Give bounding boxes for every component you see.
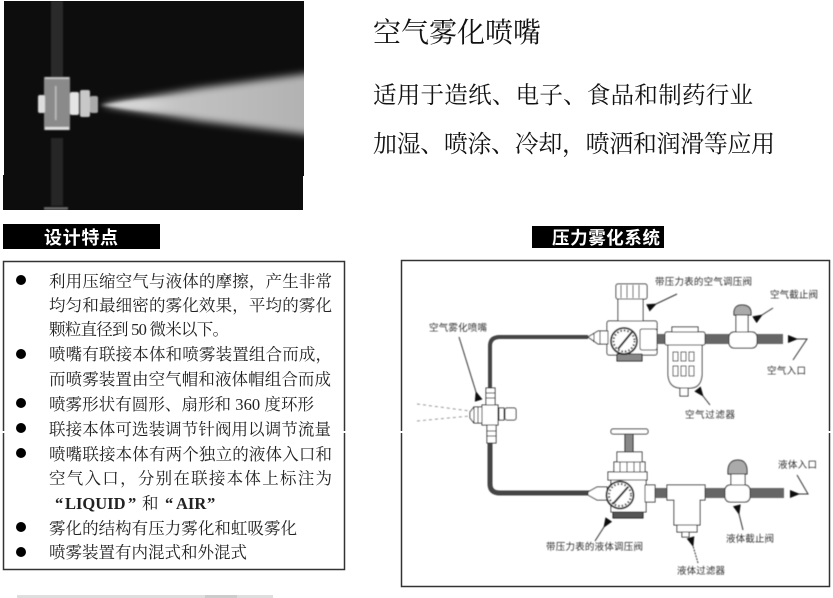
diagram labels: 空气雾化喷嘴 (429, 322, 487, 334)
feature text lines: 空气入口，分别在联接本体上标注为 (49, 469, 332, 488)
panel: pressure atomizing system diagram (400, 260, 831, 586)
feature text lines: 利用压缩空气与液体的摩擦，产生非常 (49, 272, 332, 291)
subtitle: applicable industries: 适用于造纸、电子、食品和制药行业 (373, 82, 753, 109)
air line pipe (490, 337, 588, 388)
heading: design features: 设计特点 (44, 228, 118, 248)
diagram labels: 空气截止阀 (770, 289, 818, 301)
liquid main pipe (654, 488, 784, 498)
icon: liquid pressure regulator with gauge (588, 429, 655, 518)
feature text lines: LIQUID (65, 494, 126, 513)
photo: air atomizing nozzle spraying (3, 1, 320, 210)
heading: pressure atomizing system: 压力雾化系统 (552, 228, 660, 248)
feature text lines: 喷雾装置有内混式和外混式 (49, 543, 247, 562)
diagram labels (429, 276, 818, 577)
icon: air shutoff valve (729, 305, 757, 348)
diagram labels: 空气入口 (767, 365, 806, 377)
feature text lines: 喷雾形状有圆形、扇形和 360 度环形 (49, 395, 314, 414)
feature text lines: 喷嘴联接本体有两个独立的液体入口和 (49, 445, 332, 464)
diagram labels: 液体入口 (778, 459, 817, 471)
title: 空气雾化喷嘴 (373, 17, 541, 49)
diagram labels: 液体截止阀 (726, 533, 774, 545)
diagram labels: 空气过滤器 (685, 409, 735, 421)
feature text lines: 而喷雾装置由空气帽和液体帽组合而成 (49, 370, 331, 389)
air main pipe (656, 334, 783, 344)
icon: spray nozzle (417, 388, 516, 443)
feature text lines: 均匀和最细密的雾化效果，平均的雾化 (49, 296, 332, 315)
feature text lines: “ (165, 494, 173, 513)
icon: air filter (665, 327, 705, 396)
icon: air pressure regulator with gauge (588, 284, 657, 361)
feature text lines: 颗粒直径到 50 微米以下。 (49, 320, 229, 339)
arrows: liquid side callouts (595, 475, 808, 563)
icon: liquid filter (667, 485, 705, 537)
feature text lines: ” (128, 494, 136, 513)
feature text lines: 联接本体可选装调节针阀用以调节流量 (49, 420, 331, 439)
arrows: air side callouts (459, 294, 807, 405)
bullet markers (16, 275, 26, 557)
icon: liquid shutoff valve (725, 460, 750, 502)
feature text lines: AIR (176, 494, 207, 513)
feature text lines: 和 (142, 494, 158, 513)
diagram labels: 带压力表的空气调压阀 (655, 276, 752, 288)
feature text lines: 喷嘴有联接本体和喷雾装置组合而成， (49, 345, 332, 364)
cropped grey strip at page bottom (17, 595, 273, 598)
panel: design features list (2, 262, 346, 570)
heading: design features (3, 224, 160, 249)
diagram labels: 带压力表的液体调压阀 (546, 541, 643, 553)
feature text lines: “ (55, 494, 63, 513)
liquid line pipe (490, 443, 590, 493)
subtitle: applications: 加湿、喷涂、冷却，喷洒和润滑等应用 (373, 131, 775, 158)
diagram labels: 液体过滤器 (677, 565, 725, 577)
feature text lines: 雾化的结构有压力雾化和虹吸雾化 (49, 519, 297, 538)
feature text lines (49, 272, 332, 562)
feature text lines: ” (207, 494, 215, 513)
